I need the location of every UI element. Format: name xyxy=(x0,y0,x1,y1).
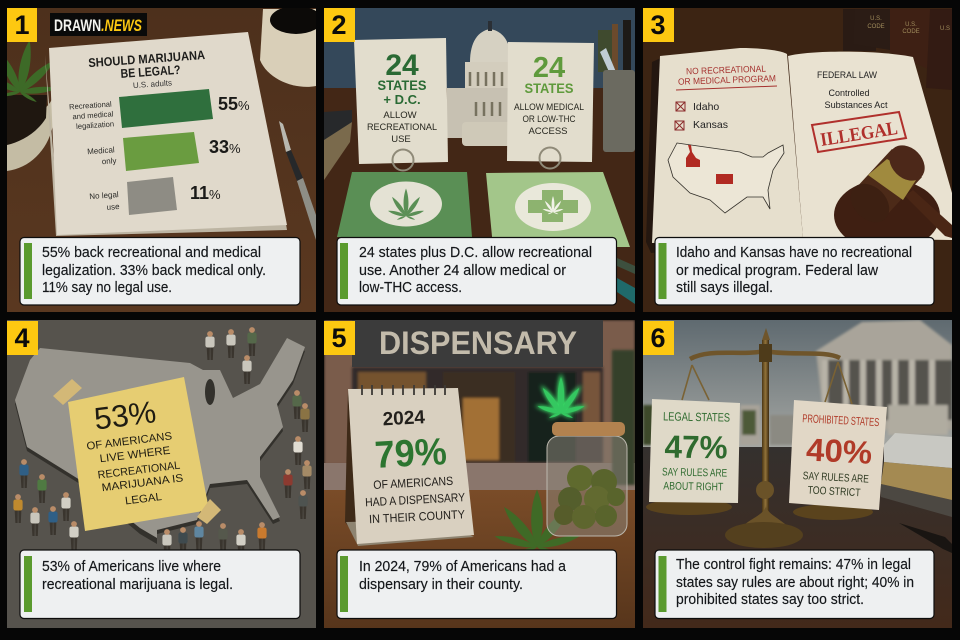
law books: CODE xyxy=(902,29,920,35)
desk xyxy=(643,447,952,628)
paper title xyxy=(88,50,205,88)
sticky note text xyxy=(81,392,186,511)
sticky note text: 53% xyxy=(92,394,158,437)
federal law note: Controlled xyxy=(828,88,870,98)
card: 24 states medical: ACCESS xyxy=(528,126,568,137)
US relief map xyxy=(15,338,305,544)
book at left xyxy=(324,110,352,180)
glass jar with buds xyxy=(547,422,627,536)
left page heading: OR MEDICAL PROGRAM xyxy=(678,73,776,87)
green stack: recreational xyxy=(337,172,472,237)
card: prohibited states: 40% xyxy=(805,431,873,471)
panel 5: dispensary access xyxy=(324,320,635,628)
card: prohibited states xyxy=(789,400,887,510)
badge: number 1 xyxy=(7,8,37,42)
caption 2: use. Another 24 allow medical or xyxy=(359,263,566,279)
icon: cannabis leaf in circle xyxy=(370,182,442,226)
sticky note text: LIVE WHERE xyxy=(99,445,171,465)
caption 1 xyxy=(20,238,300,305)
badge: number 2 xyxy=(324,8,355,42)
calendar text: HAD A DISPENSARY xyxy=(365,490,465,509)
bar: medical only 33%: Medical xyxy=(87,145,115,156)
card: 24 states + D.C.: ALLOW xyxy=(383,110,417,121)
sticky note text: MARIJUANA IS xyxy=(101,472,184,494)
desk xyxy=(324,88,635,312)
teal pens xyxy=(617,258,635,304)
bar: medical only 33%: only xyxy=(101,156,117,166)
calendar text: 79% xyxy=(374,431,448,477)
caption 4: recreational marijuana is legal. xyxy=(42,577,233,593)
sign band xyxy=(352,320,603,367)
brick building background xyxy=(324,320,635,465)
badge: number 4 xyxy=(7,321,38,355)
badge: number 2: 2 xyxy=(331,10,347,40)
badge: number 6: 6 xyxy=(650,323,666,353)
balance scale xyxy=(646,328,873,548)
cannabis leaf on table xyxy=(493,490,581,556)
bar: recreational and medical 55%: 55% xyxy=(218,94,250,114)
calendar spiral binding xyxy=(362,385,445,395)
calendar text: OF AMERICANS xyxy=(373,474,454,492)
checklist: Idaho and Kansas: Kansas xyxy=(693,119,728,131)
distant buildings and trees xyxy=(643,405,800,445)
federal law note: Substances Act xyxy=(824,100,888,110)
card: legal states: 47% xyxy=(664,428,728,466)
caption 3: still says illegal. xyxy=(676,280,773,296)
federal law note: FEDERAL LAW xyxy=(817,70,877,81)
card: 24 states + D.C. xyxy=(354,38,448,164)
desk calendar xyxy=(345,385,474,546)
caption 5: dispensary in their county. xyxy=(359,577,523,593)
store windows xyxy=(352,367,603,463)
law books xyxy=(843,9,952,90)
light green stack: medical xyxy=(486,172,630,247)
bar: no legal use 11%: No legal xyxy=(89,190,119,201)
panel 3: federal law xyxy=(643,8,952,312)
survey paper xyxy=(45,32,287,236)
card: prohibited states: TOO STRICT xyxy=(807,484,861,499)
badge: number 6 xyxy=(643,321,674,355)
neon leaf sign xyxy=(534,373,588,420)
sky xyxy=(643,320,952,450)
bar: recreational and medical 55% xyxy=(69,89,250,131)
paper title: SHOULD MARIJUANA xyxy=(88,48,205,70)
blue wall xyxy=(324,8,635,88)
card: 24 states medical: OR LOW-THC xyxy=(522,114,576,125)
sticky note text: LEGAL xyxy=(124,491,163,508)
sidewalk xyxy=(324,463,635,490)
calendar text xyxy=(360,405,466,526)
tape xyxy=(53,379,82,405)
caption 6 xyxy=(655,550,934,618)
coffee mug xyxy=(260,8,316,87)
caption 2 xyxy=(337,238,616,305)
card: 24 states + D.C.: RECREATIONAL xyxy=(367,122,437,133)
law books: U.S xyxy=(940,26,950,32)
card: legal states: ABOUT RIGHT xyxy=(663,480,724,493)
law books: CODE xyxy=(867,24,885,30)
card: 24 states + D.C.: + D.C. xyxy=(383,92,421,107)
caption 6: The control fight remains: 47% in legal xyxy=(676,557,911,573)
badge: number 3: 3 xyxy=(650,10,666,40)
wood desk background xyxy=(7,8,316,312)
left page heading xyxy=(678,66,776,85)
logo: DRAWN.NEWS: DRAWN.NEWS xyxy=(54,16,142,35)
caption 6: states say rules are about right; 40% in xyxy=(676,575,914,591)
badge: number 5: 5 xyxy=(331,323,347,353)
card: legal states: LEGAL STATES xyxy=(663,409,730,425)
federal law note xyxy=(818,72,888,108)
wood table xyxy=(324,490,635,628)
stack of papers xyxy=(881,433,952,517)
bar: no legal use 11%: use xyxy=(106,202,120,212)
card: 24 states + D.C.: STATES xyxy=(378,77,426,93)
sticky note text: RECREATIONAL xyxy=(97,460,181,482)
potted plant xyxy=(7,42,52,171)
storefront sign: DISPENSARY xyxy=(379,325,577,361)
capitol model xyxy=(447,21,508,146)
pen xyxy=(279,121,316,240)
sticky note xyxy=(53,377,221,531)
badge: number 1: 1 xyxy=(14,10,30,40)
sticky note text: OF AMERICANS xyxy=(86,430,173,453)
card: 24 states medical xyxy=(507,42,594,162)
card: 24 states medical: STATES xyxy=(524,80,574,96)
caption 3: Idaho and Kansas have no recreational xyxy=(676,245,912,261)
caption 3 xyxy=(655,238,934,305)
open notebook xyxy=(646,48,952,253)
bar: medical only 33% xyxy=(87,132,241,171)
bar: recreational and medical 55%: and medical xyxy=(72,109,114,121)
caption 4: 53% of Americans live where xyxy=(42,559,221,575)
card: 24 states + D.C.: USE xyxy=(391,134,411,145)
desk xyxy=(643,8,952,312)
card: 24 states medical: 24 xyxy=(533,52,565,84)
law books: U.S. xyxy=(905,22,917,28)
small figures xyxy=(13,327,312,558)
bar: no legal use 11%: 11% xyxy=(190,183,221,203)
paper title: BE LEGAL? xyxy=(120,63,181,81)
caption 5: In 2024, 79% of Americans had a xyxy=(359,559,567,575)
caption 3: or medical program. Federal law xyxy=(676,263,879,279)
card: legal states: SAY RULES ARE xyxy=(662,466,727,480)
courthouse building xyxy=(816,320,952,435)
card holder rings xyxy=(392,148,560,170)
calendar text: IN THEIR COUNTY xyxy=(369,507,465,526)
caption 5 xyxy=(337,550,616,618)
checklist: Idaho and Kansas: Idaho xyxy=(693,101,719,113)
caption 4 xyxy=(20,550,300,618)
badge: number 4: 4 xyxy=(14,323,30,353)
left page heading: NO RECREATIONAL xyxy=(686,64,766,76)
badge: number 3 xyxy=(643,8,674,42)
bar: recreational and medical 55%: legalization xyxy=(76,119,114,131)
caption 1: 55% back recreational and medical xyxy=(42,245,261,261)
card: prohibited states: PROHIBITED STATES xyxy=(802,413,880,429)
bar: medical only 33%: 33% xyxy=(209,137,241,157)
pen xyxy=(899,523,952,553)
card: prohibited states: SAY RULES ARE xyxy=(803,470,869,486)
bar: recreational and medical 55%: Recreational xyxy=(69,99,112,111)
tape corner xyxy=(197,499,221,524)
caption 6: prohibited states say too strict. xyxy=(676,592,864,608)
card: 24 states + D.C.: 24 xyxy=(385,49,419,82)
calendar text: 2024 xyxy=(382,407,426,430)
caption 2: low-THC access. xyxy=(359,280,462,296)
panel 1: poll xyxy=(0,6,322,312)
ILLEGAL stamp: ILLEGAL xyxy=(819,118,899,151)
caption 1: 11% say no legal use. xyxy=(42,280,172,296)
caption 2: 24 states plus D.C. allow recreational xyxy=(359,245,592,261)
great lakes xyxy=(205,379,215,405)
panel 4: population map xyxy=(7,320,316,628)
pencil cup xyxy=(598,20,635,152)
card: legal states xyxy=(649,399,740,503)
badge: number 5 xyxy=(324,321,355,355)
caption 1: legalization. 33% back medical only. xyxy=(42,263,266,279)
paper title: U.S. adults xyxy=(133,78,172,90)
bar: no legal use 11% xyxy=(89,177,221,215)
checklist: Idaho and Kansas xyxy=(675,101,728,131)
law books: U.S. xyxy=(870,16,882,22)
panel 6: control fight xyxy=(643,320,952,628)
card: 24 states medical: ALLOW MEDICAL xyxy=(514,102,584,113)
icon: medical cross with leaf xyxy=(515,183,591,231)
shrub xyxy=(612,350,635,485)
panel 2: state counts xyxy=(324,8,635,312)
US map with Idaho and Kansas xyxy=(668,143,784,213)
gavel xyxy=(834,145,952,238)
concrete background xyxy=(7,320,316,628)
